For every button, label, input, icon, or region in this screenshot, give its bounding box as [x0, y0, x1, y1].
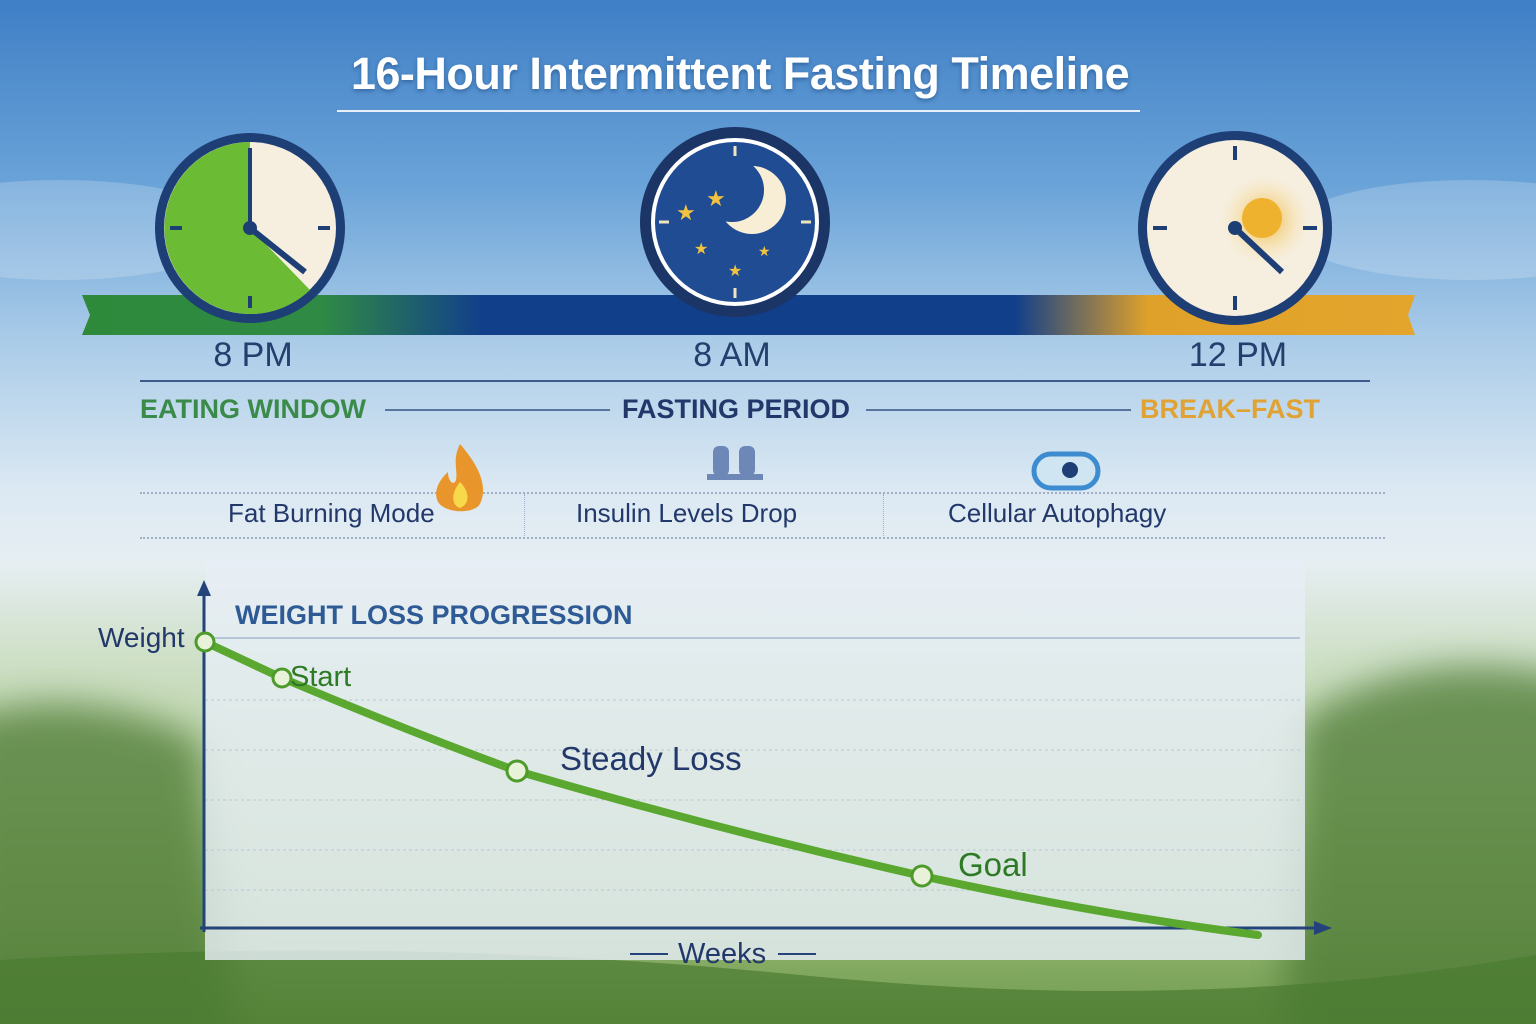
chart: weight loss progression: Weeks [678, 938, 766, 970]
chart: weight loss progression: Start [290, 661, 351, 693]
title: 16-Hour Intermittent Fasting Timeline [351, 48, 1129, 99]
chart panel [205, 560, 1305, 960]
benefits row: Fat Burning Mode [228, 498, 435, 528]
chart: weight loss progression: Goal [958, 846, 1028, 883]
icon: flame [436, 444, 484, 512]
text: 12 PM [1189, 336, 1287, 374]
clock: 8 AM [640, 127, 830, 317]
icon: insulin [707, 446, 763, 480]
clock: 8 AM: ★ [694, 241, 708, 258]
icon: cell [1032, 452, 1100, 490]
time labels: 8 PM [213, 336, 293, 374]
phase labels: FASTING PERIOD [622, 394, 850, 424]
phase labels: EATING WINDOW [140, 394, 366, 424]
text: 8 AM [693, 336, 771, 374]
timeline bar [82, 127, 1415, 335]
clock: 8 AM: ★ [676, 200, 696, 225]
phase labels [140, 394, 1320, 424]
phase labels: BREAK–FAST [1140, 394, 1320, 424]
clock: 8 AM: ★ [758, 243, 771, 259]
benefits row [140, 444, 1385, 539]
benefits row: Cellular Autophagy [948, 498, 1166, 528]
chart: weight loss progression: Weight [98, 622, 185, 653]
clock: 8 AM: ★ [728, 263, 742, 280]
decorative landscape [0, 180, 240, 280]
chart: weight loss progression: Steady Loss [560, 740, 742, 777]
axes [200, 590, 1320, 932]
clock: 8 AM: ★ [706, 186, 726, 211]
chart title: WEIGHT LOSS PROGRESSION [235, 600, 633, 630]
clock: 8 PM [155, 133, 345, 323]
weight curve [205, 642, 1258, 935]
benefits row: Insulin Levels Drop [576, 498, 797, 528]
clock: 12 PM [1138, 131, 1332, 325]
